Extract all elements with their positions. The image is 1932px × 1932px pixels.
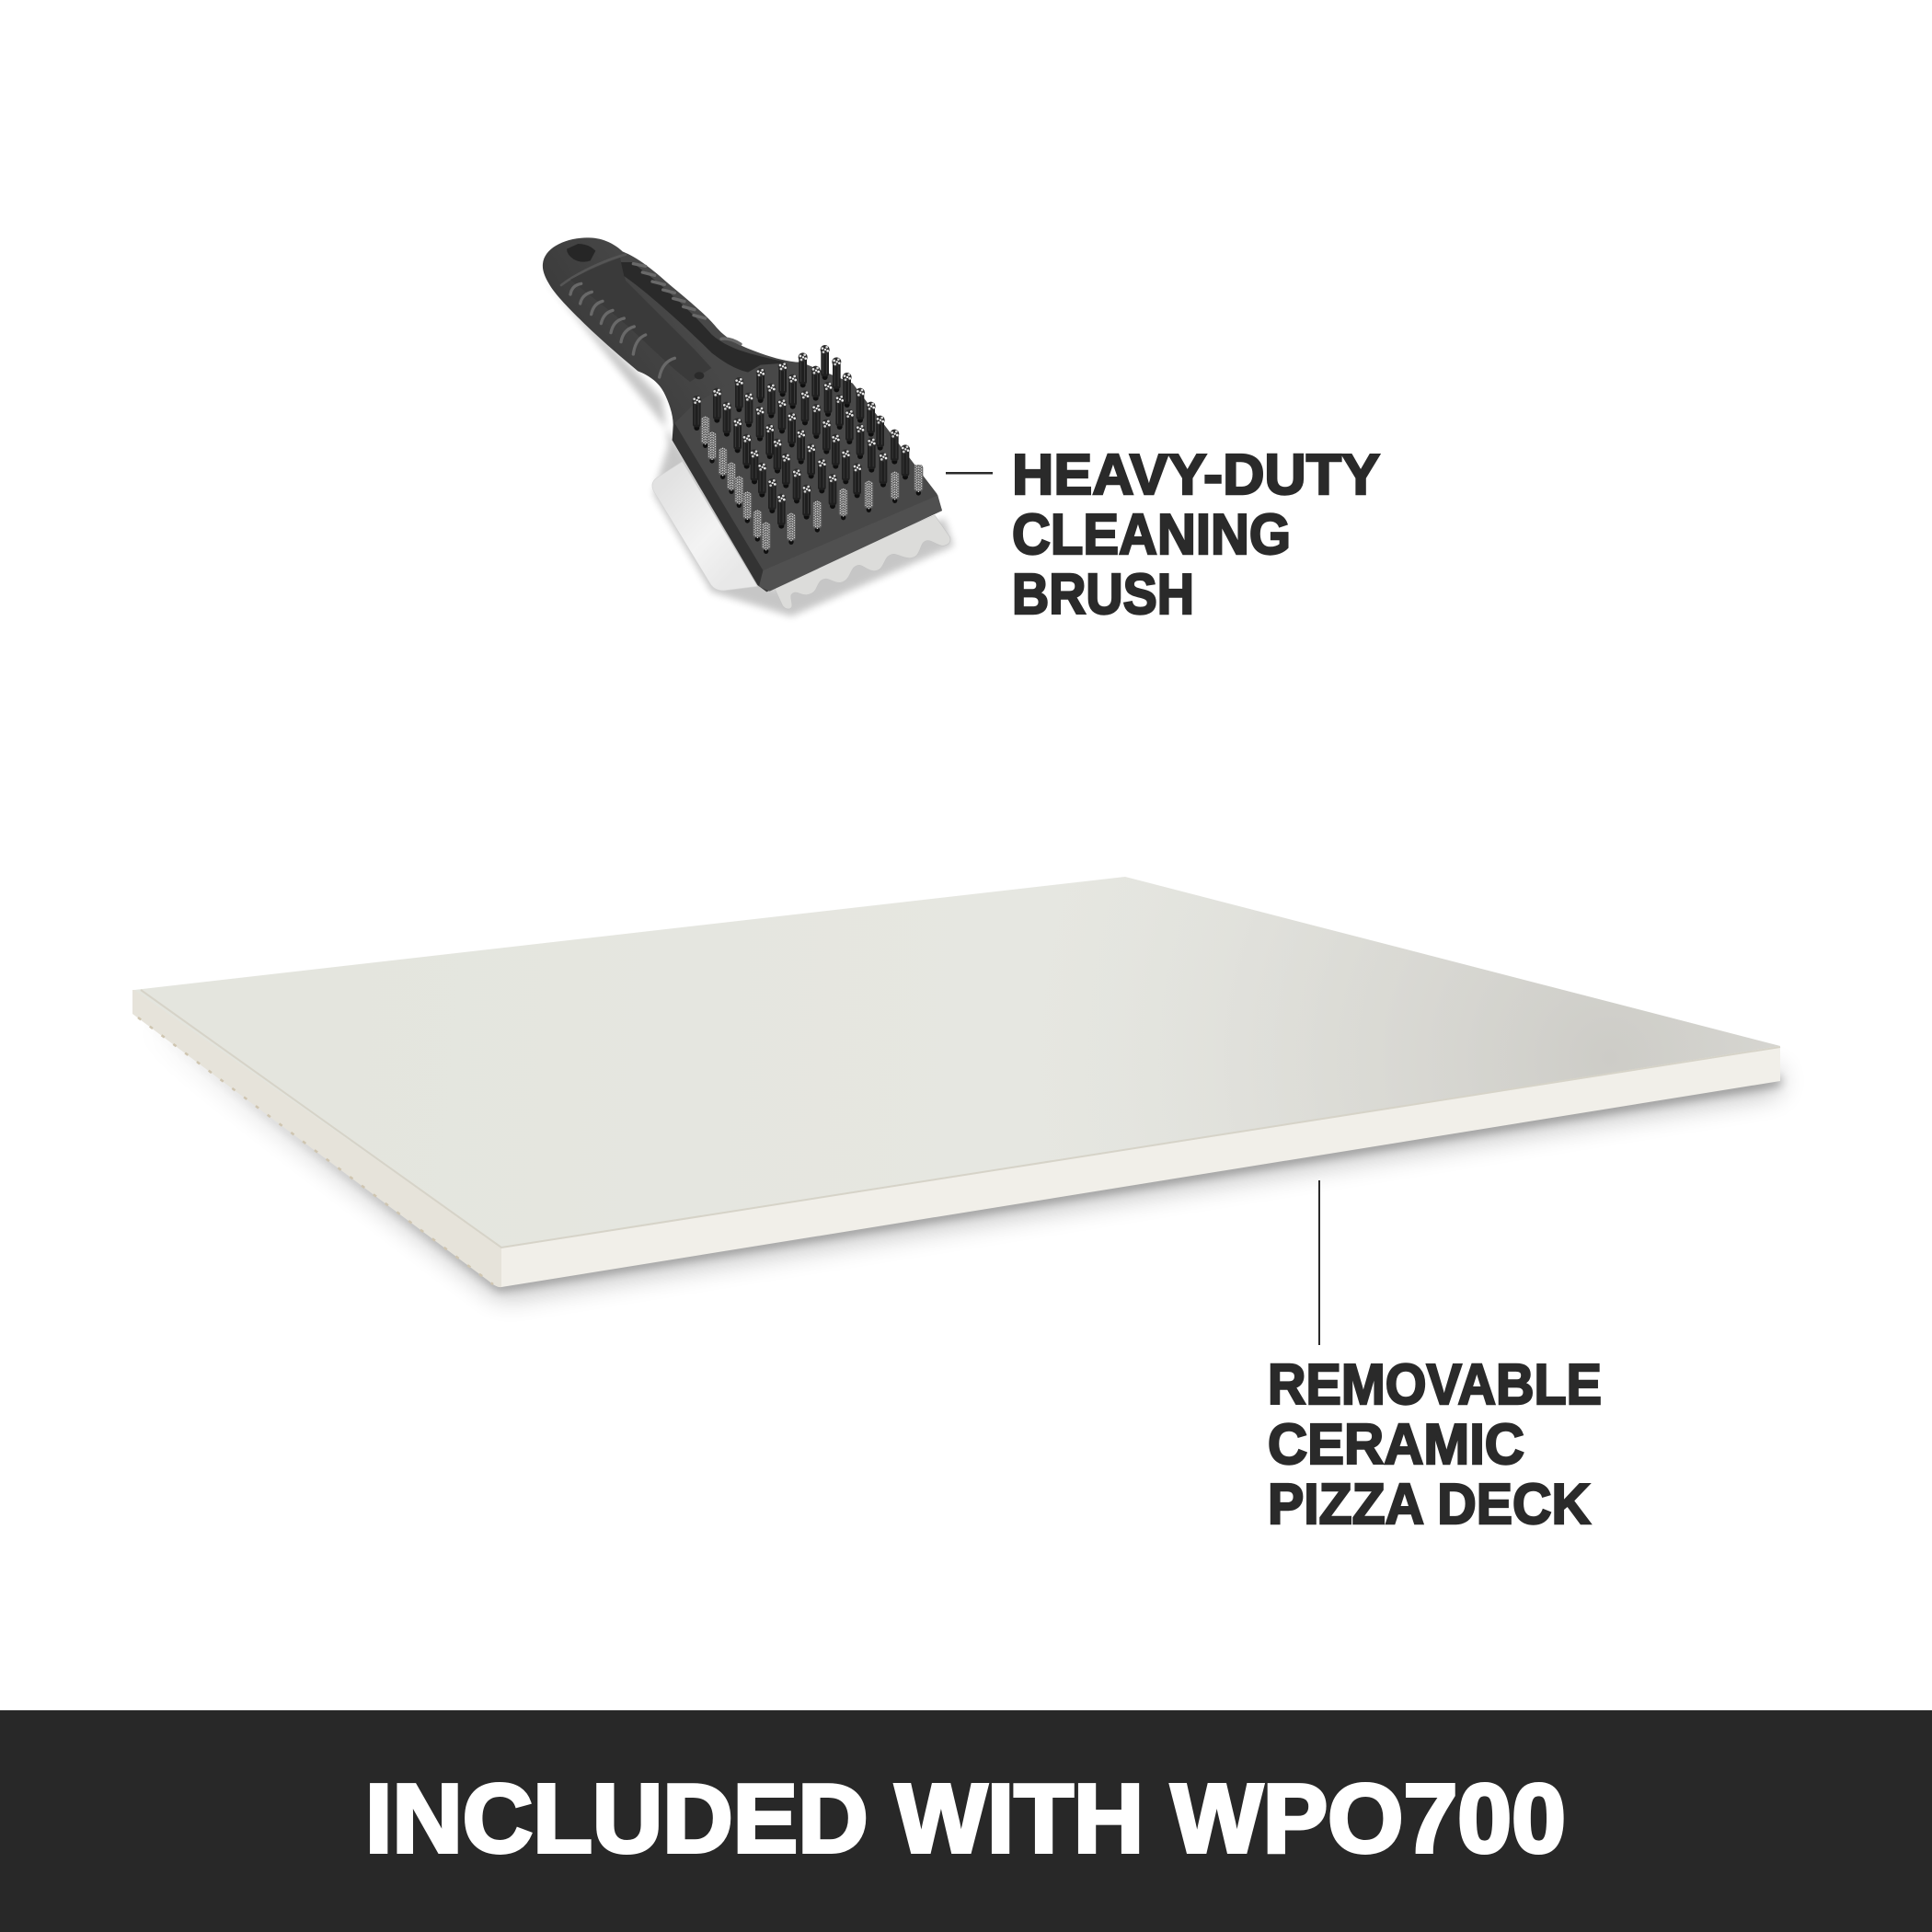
- brush plate top face: [674, 362, 937, 570]
- brush plate front rim: [759, 495, 942, 592]
- brush leader line: [946, 472, 993, 475]
- deck leader line: [1318, 1180, 1320, 1345]
- deck left side face: [132, 990, 501, 1287]
- brush shadow: [543, 276, 954, 616]
- label: heavy-duty cleaning brush: CLEANING: [1012, 502, 1291, 567]
- handle hanging hole: [567, 244, 595, 262]
- deck front face: [501, 1047, 1780, 1287]
- label: removable ceramic pizza deck: REMOVABLE: [1268, 1352, 1602, 1417]
- footer banner: [0, 1710, 1932, 1932]
- handle grip ribs: [570, 264, 741, 377]
- deck contact shadow: [134, 1016, 1781, 1291]
- handle dark groove: [621, 262, 785, 374]
- wire bristles: [692, 345, 923, 554]
- label: heavy-duty cleaning brush: HEAVY-DUTY: [1012, 443, 1380, 507]
- label: removable ceramic pizza deck: CERAMIC: [1268, 1412, 1524, 1477]
- label: heavy-duty cleaning brush: [1012, 443, 1380, 627]
- ceramic pizza deck: [132, 877, 1781, 1299]
- banner title: INCLUDED WITH WPO700: [365, 1765, 1566, 1873]
- brush handle and plate: [543, 237, 942, 592]
- deck ridge lines: [141, 990, 1780, 1248]
- deck left edge scallops: [138, 1018, 493, 1284]
- label: removable ceramic pizza deck: PIZZA DECK: [1268, 1472, 1591, 1536]
- handle upper rim: [561, 255, 626, 285]
- handle grip flat: [570, 258, 711, 382]
- label: heavy-duty cleaning brush: BRUSH: [1012, 562, 1194, 627]
- front scraper blade: [772, 515, 950, 609]
- deck top surface: [134, 877, 1780, 1248]
- banner background: [0, 1710, 1932, 1932]
- screw hole: [695, 372, 704, 379]
- icon: cleaning brush: [543, 237, 954, 616]
- left scraper blade: [652, 462, 757, 591]
- deck shadow: [138, 1021, 1780, 1299]
- label: removable ceramic pizza deck: [1268, 1352, 1602, 1536]
- brush plate left rim: [673, 423, 763, 586]
